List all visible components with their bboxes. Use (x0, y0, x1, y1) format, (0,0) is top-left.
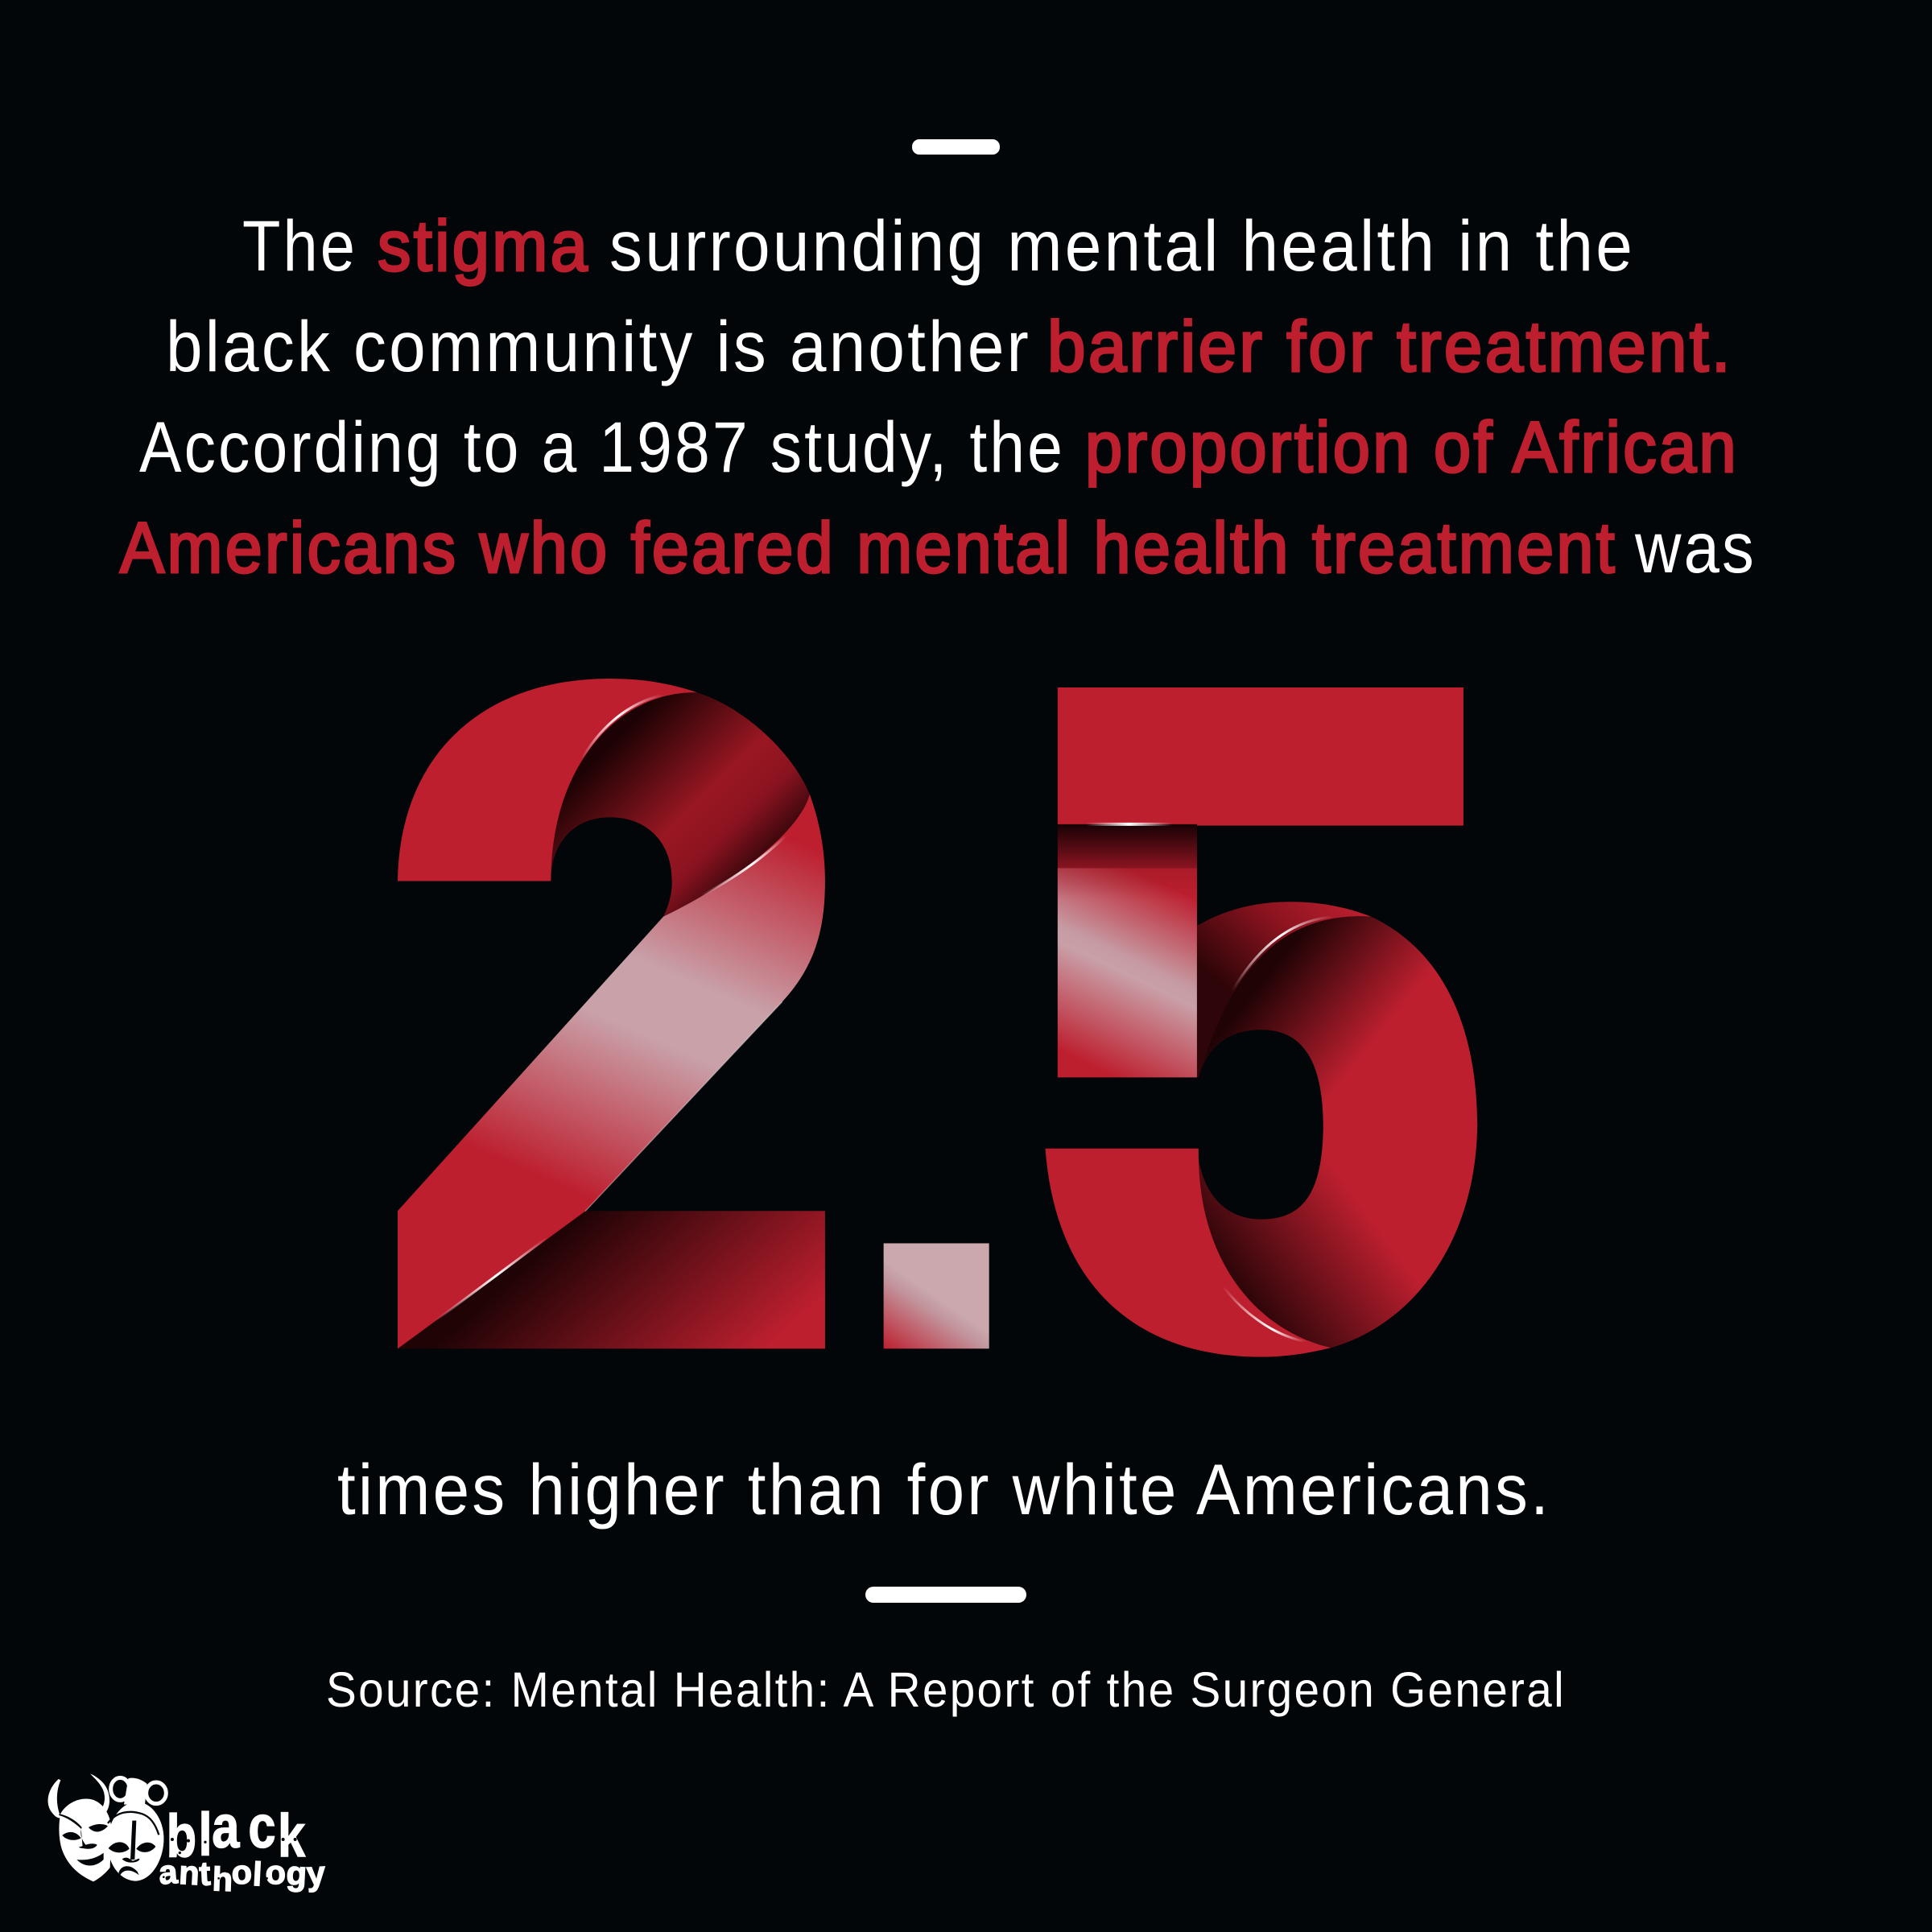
text line 2: black community is another (166, 306, 1031, 386)
word: anthology: anthology (158, 1852, 326, 1898)
digit 2 highlights (436, 695, 786, 1321)
digit 5 light stem (1058, 868, 1197, 1077)
digit 5 bowl lower shade (1197, 1122, 1477, 1348)
closing sentence: times higher than for white Americans. (337, 1449, 1551, 1530)
digit 5 stem shadow (1058, 868, 1197, 898)
text line 2 (166, 306, 1733, 386)
text line 2: barrier for treatment. (1047, 306, 1733, 386)
big ribbon number 2.5 (398, 679, 1477, 1357)
digit 5 bowl upper shade (1199, 916, 1477, 1127)
text line 1 (242, 205, 1635, 286)
logo: black anthology (48, 1773, 326, 1898)
digit 2 base dark shade (398, 1211, 825, 1348)
text line 1: stigma (378, 205, 590, 286)
intro text block (120, 205, 1757, 588)
text line 1: surrounding mental health in the (609, 205, 1635, 286)
digit 5 top bar (1058, 687, 1463, 826)
word: black: black (167, 1793, 306, 1870)
digit 5 bowl top crescent (1197, 902, 1371, 1077)
text line 1: The (242, 205, 357, 286)
source line: Source: Mental Health: A Report of the Surgeon General (326, 1662, 1566, 1717)
text line 3: proportion of African (1085, 407, 1739, 487)
digit 2 light diagonal (398, 795, 825, 1348)
digit 2 dark fold (551, 692, 810, 917)
digit 2 top solid arc (398, 679, 697, 881)
text line 3 (139, 407, 1739, 487)
icon: frowning mask (107, 1777, 166, 1881)
bottom divider bar (865, 1587, 1026, 1603)
ribbon digit 5 (1046, 687, 1477, 1357)
top divider bar (912, 139, 1000, 155)
digit 5 tail (1046, 1149, 1331, 1357)
text line 4: was (1634, 507, 1757, 588)
digit 5 dark stem top (1058, 824, 1197, 868)
ribbon digit 2 (398, 679, 825, 1348)
digit 5 highlights (1086, 824, 1332, 1342)
decimal point (884, 1243, 989, 1348)
icon: smiling mask (48, 1773, 111, 1881)
text line 4: Americans who feared mental health treatment (120, 507, 1617, 588)
logo wordmark (158, 1793, 326, 1898)
text line 3: According to a 1987 study, the (139, 407, 1065, 487)
